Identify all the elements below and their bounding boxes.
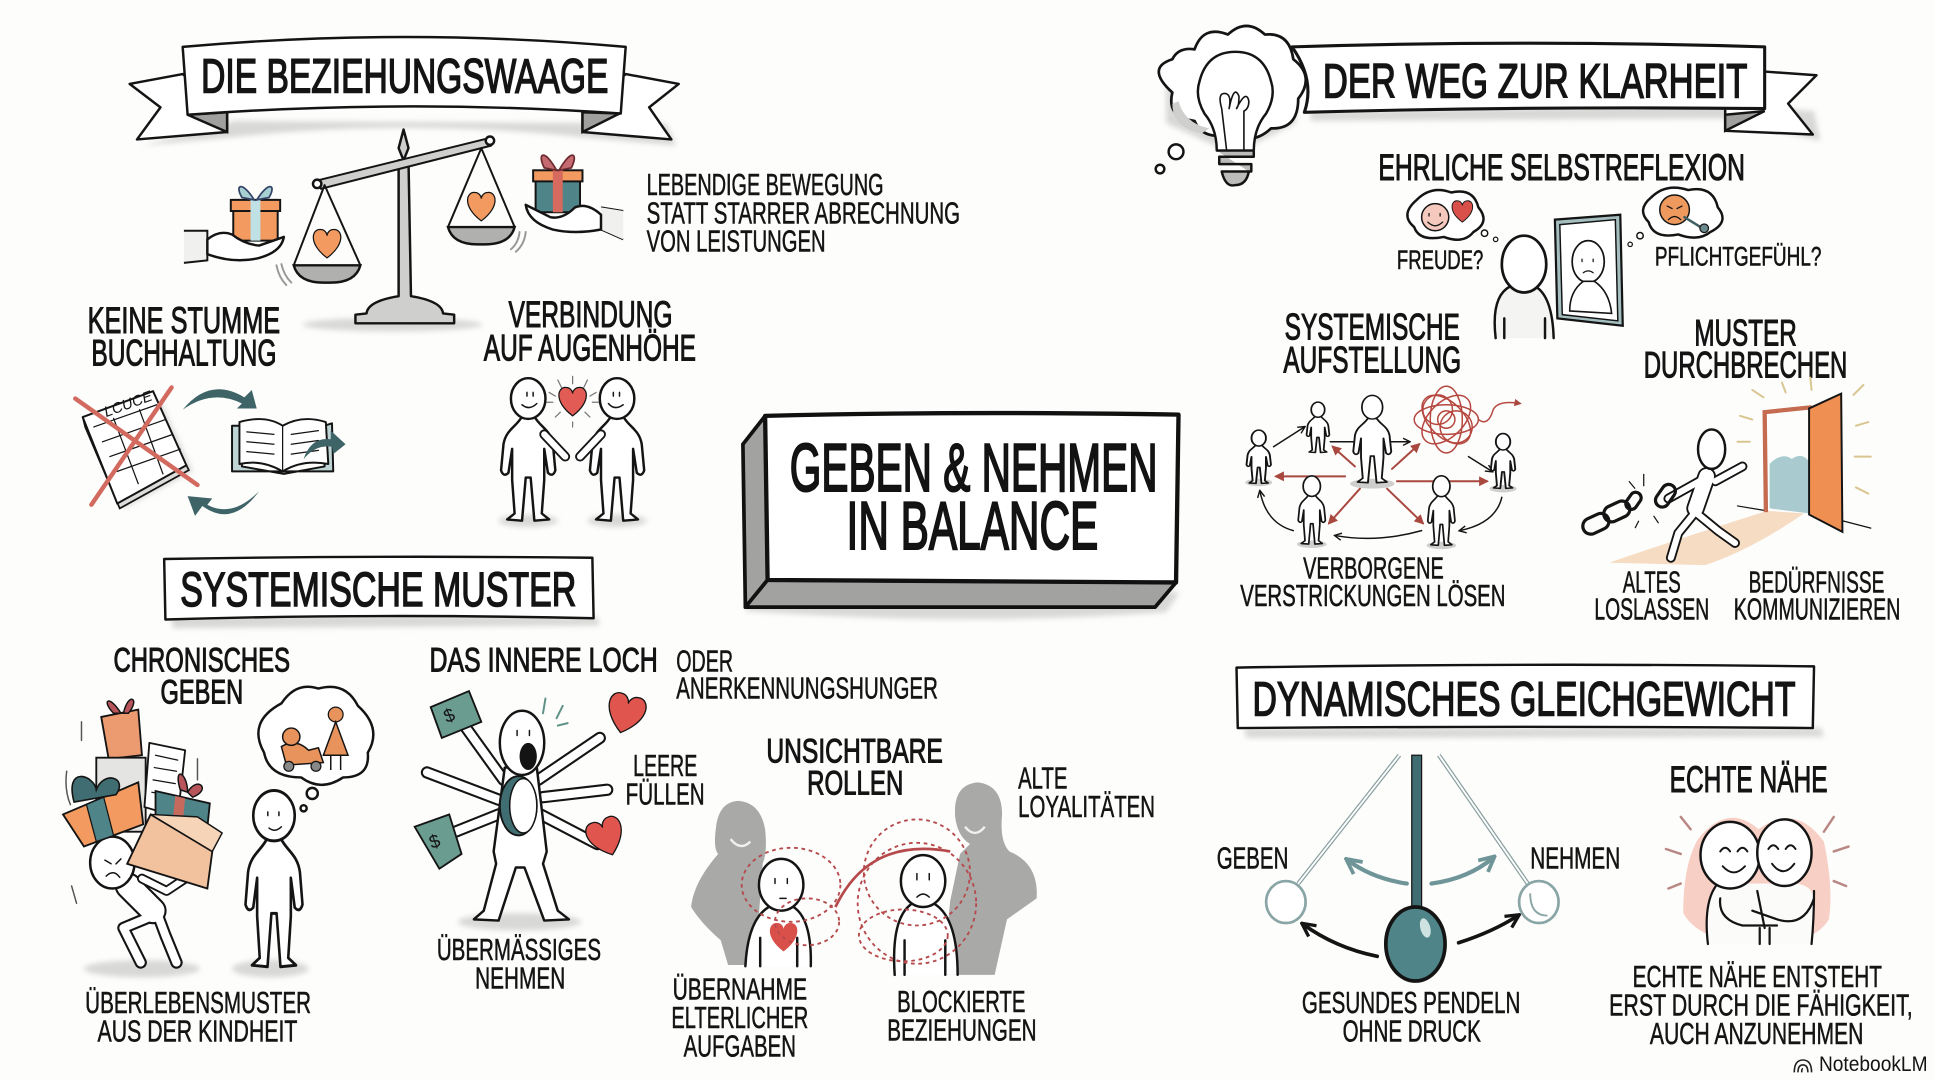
icon: two persons hugging: [1666, 817, 1849, 944]
label: Freude?: FREUDE?: [1397, 244, 1483, 275]
label: Uebernahme elterlicher Aufgaben: ÜBERNAHME: [673, 972, 807, 1007]
label: verborgene Verstrickungen: [1240, 551, 1506, 613]
label: Pflichtgefuehl?: PFLICHTGEFÜHL?: [1655, 240, 1821, 271]
label: uebermaessiges Nehmen: NEHMEN: [475, 960, 565, 995]
heading: Muster durchbrechen: [1644, 312, 1847, 386]
chain: [1580, 474, 1678, 537]
icon: crossed ledger to open book: [75, 387, 346, 516]
heading: Muster durchbrechen: MUSTER: [1694, 312, 1797, 354]
heading: das innere Loch: [429, 641, 938, 705]
icon: standing person with childhood thought cloud: [232, 687, 373, 977]
person: left child: [745, 859, 811, 966]
label: Geben: GEBEN: [1217, 841, 1288, 876]
diagram: pendulum: [1266, 755, 1559, 981]
icon: invisible roles with silhouettes and dashed loops: [691, 782, 1037, 975]
silhouette: parent woman: [691, 801, 766, 965]
door: [1738, 378, 1871, 532]
banner: Der Weg zur Klarheit: [1292, 43, 1820, 141]
heading: unsichtbare Rollen: UNSICHTBARE: [766, 733, 943, 771]
text: lebendige Bewegung: VON LEISTUNGEN: [647, 224, 826, 259]
diagram: family constellation with tangle: [1245, 386, 1520, 549]
label: Uebernahme elterlicher Aufgaben: ELTERLICHER: [671, 1000, 808, 1035]
heading: das innere Loch: DAS INNERE LOCH: [429, 641, 658, 679]
label: Ueberlebensmuster: AUS DER KINDHEIT: [98, 1013, 298, 1048]
arrows between figures: [1260, 427, 1502, 538]
heading: Verbindung auf Augenhoehe: VERBINDUNG: [508, 293, 673, 335]
icon: hand with teal gift: [526, 155, 623, 239]
ghost pendulum right: [1439, 755, 1559, 923]
heading: chronisches Geben: CHRONISCHES: [114, 641, 290, 679]
panel: central title block: [743, 413, 1180, 619]
running person: [1668, 429, 1742, 558]
banner: Systemische Muster: SYSTEMISCHE MUSTER: [180, 563, 576, 617]
heading: ehrliche Selbstreflexion: EHRLICHE SELBSTREFLEXION: [1378, 146, 1745, 188]
heading: das innere Loch: ODER: [676, 643, 733, 678]
icon: balance scale with hearts and gifts: [184, 130, 623, 331]
banner: Dynamisches Gleichgewicht: [1237, 665, 1824, 738]
label: blockierte Beziehungen: BEZIEHUNGEN: [887, 1012, 1037, 1047]
banner title: DIE BEZIEHUNGSWAAGE: [201, 50, 608, 104]
heading: chronisches Geben: [114, 641, 290, 711]
label: blockierte Beziehungen: [887, 984, 1037, 1047]
icon: person carrying pile of gifts: [63, 699, 222, 977]
label: verborgene Verstrickungen: VERSTRICKUNGEN LÖSEN: [1240, 578, 1506, 613]
thought cloud with teddy and girl: [258, 687, 373, 811]
label: alte Loyalitaeten: [1018, 761, 1155, 824]
label: leere fuellen: [626, 748, 705, 812]
label: gesundes Pendeln: [1302, 985, 1520, 1048]
central title text: GEBEN & NEHMEN: [790, 431, 1158, 506]
label: blockierte Beziehungen: BLOCKIERTE: [897, 984, 1025, 1019]
heading: Verbindung auf Augenhoehe: AUF AUGENHÖHE: [484, 326, 696, 368]
central title text: [790, 431, 1158, 564]
label: verborgene Verstrickungen: VERBORGENE: [1303, 551, 1444, 586]
text: lebendige Bewegung: [647, 167, 960, 259]
silhouette: parent man: [943, 782, 1037, 975]
heading: das innere Loch: ANERKENNUNGSHUNGER: [676, 670, 938, 705]
banner: Systemische Muster: [164, 557, 600, 628]
banner: Die Beziehungswaage: [130, 37, 679, 146]
icon: light bulb in cloud: [1156, 26, 1306, 185]
heading: keine stumme Buchhaltung: [88, 299, 280, 373]
heading: echte Naehe: ECHTE NÄHE: [1670, 758, 1828, 800]
icon: crossed ledger to open book: LCUCE: [102, 389, 155, 421]
label: alte Loyalitaeten: ALTE: [1018, 761, 1067, 796]
label: gesundes Pendeln: GESUNDES PENDELN: [1302, 985, 1520, 1020]
label: Ueberlebensmuster: [85, 985, 311, 1048]
label: leere fuellen: FÜLLEN: [626, 777, 705, 812]
label: leere fuellen: LEERE: [633, 748, 697, 783]
label: uebermaessiges Nehmen: [437, 932, 601, 995]
mirror: [1555, 215, 1623, 326]
label: altes loslassen: ALTES: [1623, 564, 1681, 599]
label: gesundes Pendeln: OHNE DRUCK: [1343, 1013, 1481, 1048]
central title text: IN BALANCE: [847, 489, 1098, 564]
heading: keine stumme Buchhaltung: BUCHHALTUNG: [91, 331, 276, 373]
heading: Verbindung auf Augenhoehe: [484, 293, 696, 368]
heading: systemische Aufstellung: [1283, 305, 1461, 381]
person: right child: [894, 855, 958, 975]
watermark: NotebookLM: NotebookLM: [1819, 1053, 1928, 1076]
label: Uebernahme elterlicher Aufgaben: AUFGABEN: [684, 1028, 796, 1063]
thought cloud: joy: [1407, 190, 1498, 242]
heading: keine stumme Buchhaltung: KEINE STUMME: [88, 299, 280, 341]
bent person: [90, 837, 185, 963]
banner title: DER WEG ZUR KLARHEIT: [1323, 54, 1747, 108]
heading: systemische Aufstellung: SYSTEMISCHE: [1285, 305, 1460, 347]
label: altes loslassen: [1594, 564, 1709, 626]
label: altes loslassen: LOSLASSEN: [1594, 591, 1709, 626]
text: echte Naehe entsteht: [1609, 959, 1913, 1051]
heading: chronisches Geben: GEBEN: [160, 673, 243, 711]
main pendulum: [1386, 755, 1445, 981]
icon: two persons with heart: [499, 376, 647, 527]
icon: person before mirror with thought clouds: [1407, 188, 1723, 338]
heading: unsichtbare Rollen: [766, 733, 943, 803]
money bills: [415, 691, 481, 869]
ghost pendulum left: [1266, 755, 1399, 923]
heading: systemische Aufstellung: AUFSTELLUNG: [1283, 339, 1461, 381]
red tangle: [1413, 386, 1520, 453]
label: Beduerfnisse kommunizieren: [1734, 564, 1900, 626]
label: alte Loyalitaeten: LOYALITÄTEN: [1018, 789, 1155, 824]
text: lebendige Bewegung: LEBENDIGE BEWEGUNG: [647, 167, 884, 202]
thought cloud: duty: [1628, 188, 1723, 247]
icon: person breaking chain walking through door: [1580, 378, 1871, 565]
heading: unsichtbare Rollen: ROLLEN: [807, 765, 903, 803]
icon: hand with orange gift: [184, 187, 284, 263]
money bills: $: [440, 704, 458, 727]
dashed entanglement loops: [742, 819, 976, 964]
icon: person with inner hole and many arms: [415, 691, 648, 930]
person from behind: [1495, 236, 1554, 338]
arms: [427, 718, 607, 844]
pendulum arrows: [1303, 858, 1518, 956]
label: Uebernahme elterlicher Aufgaben: [671, 972, 808, 1063]
text: lebendige Bewegung: STATT STARRER ABRECHNUNG: [647, 195, 960, 230]
label: Nehmen: NEHMEN: [1530, 841, 1620, 876]
label: uebermaessiges Nehmen: ÜBERMÄSSIGES: [437, 932, 601, 967]
money bills: $: [426, 829, 443, 853]
label: Ueberlebensmuster: ÜBERLEBENSMUSTER: [85, 985, 311, 1020]
